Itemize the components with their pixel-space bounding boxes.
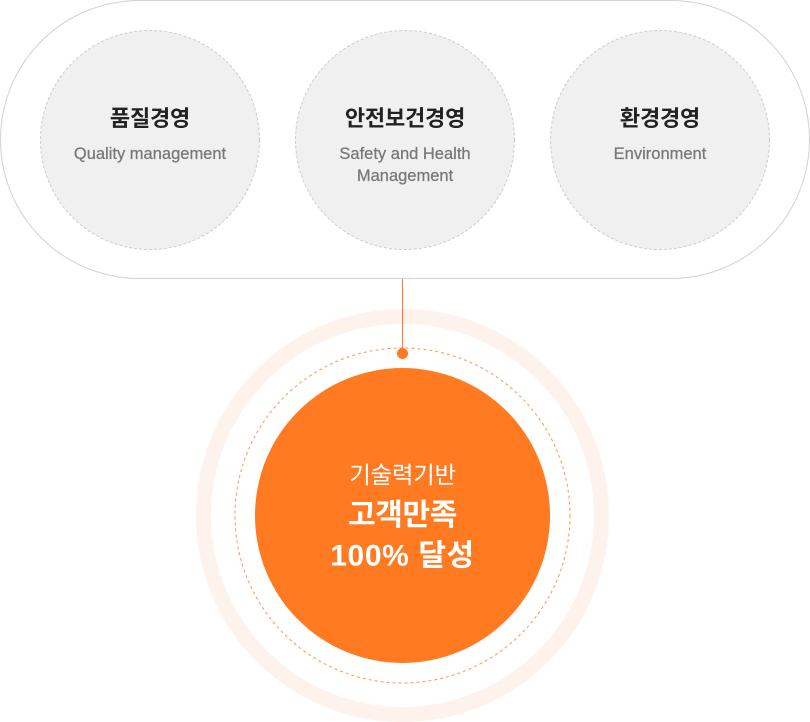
circle: quality management: 품질경영 (110, 106, 190, 131)
central goal circle (255, 368, 550, 663)
circle: environment (550, 30, 770, 250)
circle: safety and health management: Safety and Health (339, 145, 471, 163)
goal heading (330, 499, 475, 572)
connector line and dot (397, 279, 408, 359)
circle: environment: 환경경영 (620, 106, 700, 131)
panel: management systems pill (0, 0, 810, 278)
circle: safety and health management: Management (357, 167, 454, 185)
circle: safety and health management (296, 30, 514, 250)
dashed orange ring (235, 348, 570, 683)
circle: safety and health management: 안전보건경영 (345, 106, 465, 131)
circle: quality management: Quality management (74, 145, 227, 163)
circle: environment: Environment (614, 145, 707, 163)
goal heading: 100% 달성 (330, 540, 475, 572)
circle: quality management (40, 30, 260, 250)
goal heading: 고객만족 (348, 499, 457, 532)
outer pale ring (204, 316, 602, 714)
goal subtitle: 기술력기반 (349, 462, 456, 488)
